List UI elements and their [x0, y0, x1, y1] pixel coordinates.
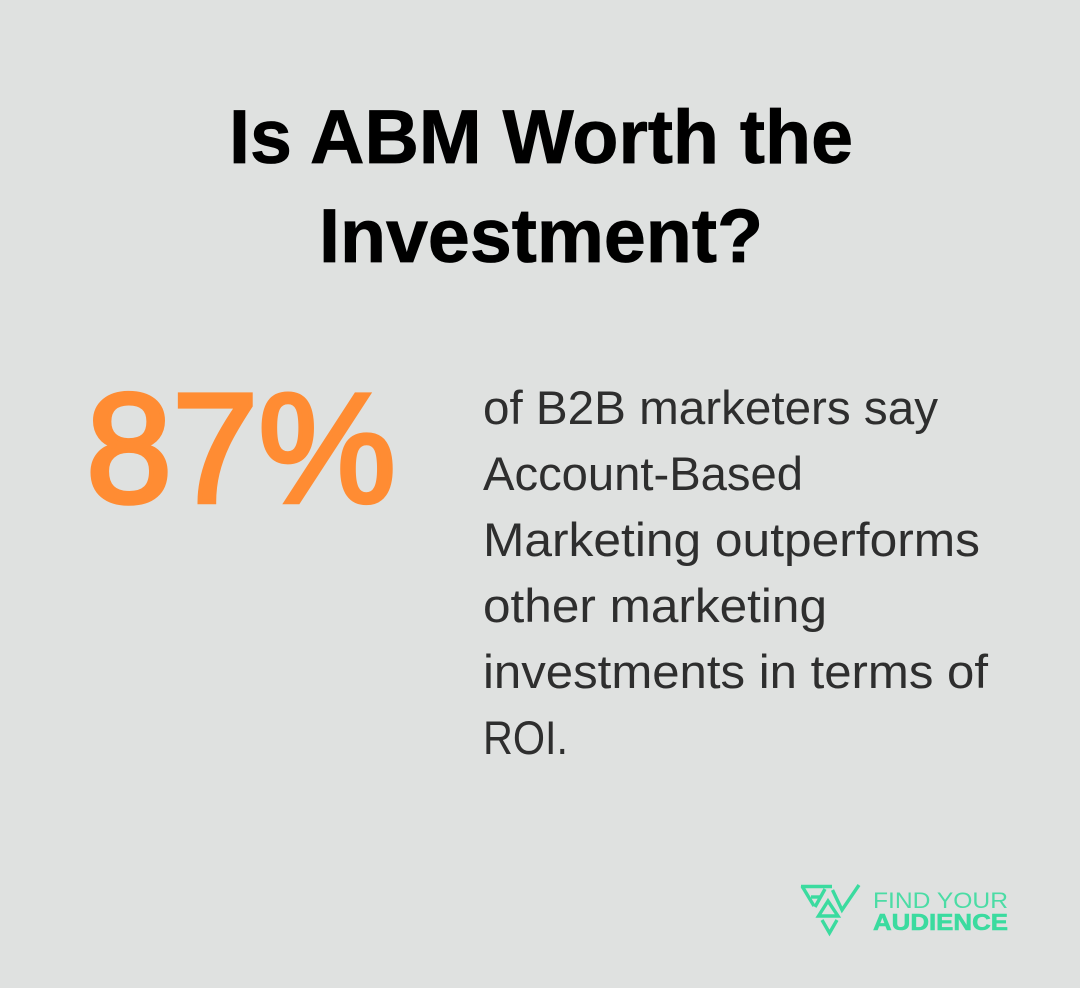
statistic description: Marketing outperforms [483, 513, 980, 566]
statistic description [483, 381, 989, 764]
statistic description: ROI. [483, 711, 568, 764]
statistic description: investments in terms of [483, 645, 989, 698]
statistic description: of B2B marketers say [483, 381, 939, 434]
logo wordmark [873, 888, 1008, 935]
logo wordmark: FIND YOUR [873, 888, 1008, 913]
logo: Find Your Audience [801, 885, 1008, 935]
statistic description: Account-Based [483, 447, 803, 500]
icon: triangle logo mark [801, 885, 859, 933]
title: Investment? [319, 194, 763, 279]
title: Is ABM Worth the [229, 95, 853, 180]
logo wordmark: AUDIENCE [873, 909, 1008, 935]
big statistic: 87%: 87% [86, 362, 396, 536]
statistic description: other marketing [483, 579, 827, 632]
title [229, 95, 853, 279]
